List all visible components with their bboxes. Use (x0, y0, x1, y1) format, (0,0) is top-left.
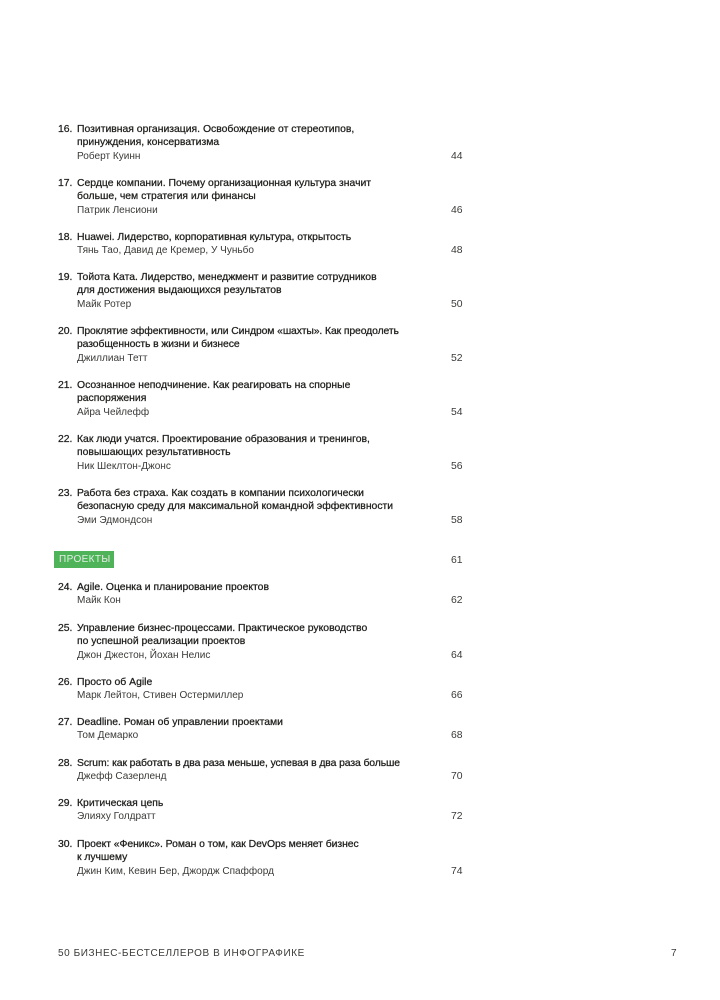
entry 19 (58, 272, 463, 310)
entry 21: Айра Чейлефф (77, 406, 149, 418)
entry 24: Майк Кон (77, 594, 121, 606)
entry 19: для достижения выдающихся результатов (77, 285, 282, 296)
entry 19: Тойота Ката. Лидерство, менеджмент и развитие сотрудников (77, 272, 377, 283)
entry 29: Элияху Голдратт (77, 810, 156, 822)
entry 20: Проклятие эффективности, или Синдром «шахты». Как преодолеть (77, 326, 399, 337)
entry 28: 28. (58, 758, 72, 769)
entry 19: 50 (451, 298, 463, 310)
entry 16: Позитивная организация. Освобождение от стереотипов, (77, 124, 354, 135)
entry 23: 58 (451, 514, 463, 526)
entry 24: Agile. Оценка и планирование проектов (77, 582, 269, 593)
entry 29 (58, 798, 463, 822)
entry 21: 54 (451, 406, 463, 418)
entry 25: 25. (58, 623, 72, 634)
entry 17: больше, чем стратегия или финансы (77, 191, 256, 202)
section page number: 61 (451, 555, 463, 566)
entry 16: Роберт Куинн (77, 150, 140, 162)
entry 18: Тянь Тао, Давид де Кремер, У Чуньбо (77, 244, 254, 256)
section heading: проекты (54, 551, 114, 568)
entry 20: разобщенность в жизни и бизнесе (77, 339, 240, 350)
entry 26: Марк Лейтон, Стивен Остермиллер (77, 690, 243, 700)
entry 30: Проект «Феникс». Роман о том, как DevOps меняет бизнес (77, 839, 359, 850)
entry 30: Джин Ким, Кевин Бер, Джордж Спаффорд (77, 866, 274, 876)
entry 18: Huawei. Лидерство, корпоративная культура, открытость (77, 232, 351, 243)
entry 22 (58, 434, 463, 472)
entry 23 (58, 488, 463, 526)
entry 24: 24. (58, 582, 72, 593)
entry 27: Deadline. Роман об управлении проектами (77, 717, 283, 728)
entry 27: 68 (451, 730, 463, 740)
entry 18: 18. (58, 232, 72, 243)
entry 22: Ник Шеклтон-Джонс (77, 460, 171, 472)
entry 16: 44 (451, 150, 463, 162)
entry 25: 64 (451, 650, 463, 660)
entry 19: 19. (58, 272, 72, 283)
entry 25: Джон Джестон, Йохан Нелис (77, 650, 210, 660)
entry 16 (58, 124, 463, 162)
entry 28: Scrum: как работать в два раза меньше, успевая в два раза больше (77, 758, 400, 769)
entry 18: 48 (451, 244, 463, 256)
entry 29: 72 (451, 810, 463, 822)
entry 27: 27. (58, 717, 72, 728)
entry 25 (58, 623, 463, 660)
entry 20: Джиллиан Тетт (77, 352, 147, 364)
entry 28: 70 (451, 770, 463, 782)
entry 26 (58, 677, 463, 700)
entry 30: 74 (451, 866, 463, 876)
entry 27: Том Демарко (77, 730, 138, 740)
entry 24: 62 (451, 594, 463, 606)
entry 23: Эми Эдмондсон (77, 514, 152, 526)
entry 21: 21. (58, 380, 72, 391)
entry 17: 17. (58, 178, 72, 189)
entry 16: 16. (58, 124, 72, 135)
entry 18 (58, 232, 463, 256)
footer: page number: 7 (671, 948, 677, 959)
entry 17 (58, 178, 463, 216)
entry 20 (58, 326, 463, 364)
entry 23: безопасную среду для максимальной командной эффективности (77, 501, 393, 512)
entry 25: по успешной реализации проектов (77, 636, 245, 647)
entry 28: Джефф Сазерленд (77, 770, 166, 782)
entry 17: Патрик Ленсиони (77, 204, 158, 216)
entry 26: 66 (451, 690, 463, 700)
entry 20: 20. (58, 326, 72, 337)
section heading: проекты: ПРОЕКТЫ (59, 554, 111, 565)
entry 16: принуждения, консерватизма (77, 137, 219, 148)
entry 22: Как люди учатся. Проектирование образования и тренингов, (77, 434, 370, 445)
entry 22: повышающих результативность (77, 447, 231, 458)
entry 30: к лучшему (77, 852, 127, 863)
entry 25: Управление бизнес-процессами. Практическое руководство (77, 623, 367, 634)
entry 30: 30. (58, 839, 72, 850)
entry 28 (58, 758, 463, 782)
entry 19: Майк Ротер (77, 298, 131, 310)
entry 27 (58, 717, 463, 740)
entry 21: Осознанное неподчинение. Как реагировать на спорные (77, 380, 350, 391)
entry 23: 23. (58, 488, 72, 499)
entry 22: 56 (451, 460, 463, 472)
entry 29: Критическая цепь (77, 798, 163, 809)
entry 20: 52 (451, 352, 463, 364)
entry 17: Сердце компании. Почему организационная культура значит (77, 178, 371, 189)
entry 30 (58, 839, 463, 876)
entry 23: Работа без страха. Как создать в компании психологически (77, 488, 364, 499)
entry 17: 46 (451, 204, 463, 216)
entry 26: Просто об Agile (77, 677, 152, 688)
entry 21: распоряжения (77, 393, 146, 404)
entry 22: 22. (58, 434, 72, 445)
entry 24 (58, 582, 463, 606)
entry 26: 26. (58, 677, 72, 688)
footer: book title: 50 БИЗНЕС-БЕСТСЕЛЛЕРОВ В ИНФОГРАФИКЕ (58, 948, 305, 959)
entry 21 (58, 380, 463, 418)
entry 29: 29. (58, 798, 72, 809)
